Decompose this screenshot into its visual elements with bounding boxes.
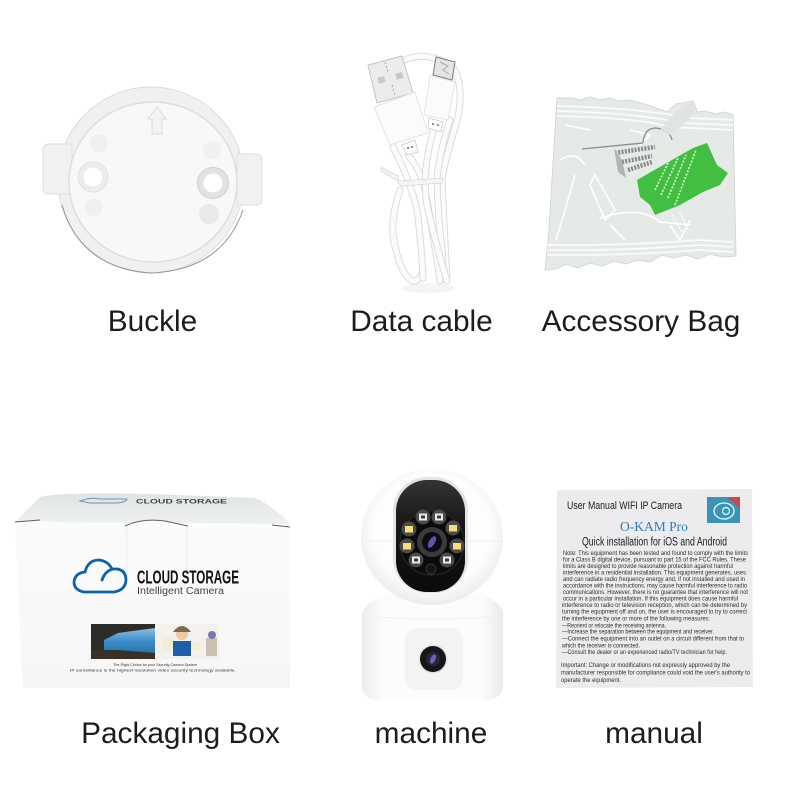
manual body text <box>561 551 751 684</box>
dark face <box>396 480 465 592</box>
manual body text: for a Class B digital device, pursuant to part 15 of the FCC Rules. These <box>563 558 747 564</box>
manual body text: interference in a residential installation. This equipment generates, uses <box>563 570 746 576</box>
image: user manual <box>556 489 753 688</box>
lid text: CLOUD STORAGE <box>136 498 228 506</box>
label: Data cable: Data cable <box>350 305 493 338</box>
manual subtitle: Quick installation for iOS and Android <box>582 536 727 548</box>
box lid <box>15 493 290 524</box>
image: dual-lens camera <box>361 469 503 700</box>
manual body text: limits are designed to provide reasonable protection against harmful <box>563 564 733 570</box>
green anchors <box>637 143 728 215</box>
image: packaging box <box>15 493 290 688</box>
USB metal plug <box>368 56 413 103</box>
buckle screw holes <box>78 162 228 198</box>
manual card <box>556 489 753 688</box>
micro USB metal plug <box>433 57 455 80</box>
manual body text: communications. However, there is no guarantee that interference will not <box>563 590 748 596</box>
product name: O-KAM Pro <box>620 519 688 534</box>
cloud icon <box>74 560 126 592</box>
image: accessory bag <box>545 97 736 270</box>
manual body text: manufacturer responsible for compliance could void the user's authority to <box>561 671 751 677</box>
image: data cable <box>368 56 460 293</box>
bag seal lines <box>547 106 733 255</box>
manual body text: —Consult the dealer or an experienced radio/TV technician for help. <box>562 650 727 656</box>
main lens <box>417 527 447 557</box>
bag wrinkles <box>556 125 690 240</box>
label: Accessory Bag: Accessory Bag <box>542 305 740 338</box>
screws <box>615 147 655 170</box>
box flap crease <box>127 527 187 577</box>
bag knot <box>660 101 695 135</box>
cable tie <box>381 167 443 186</box>
photo: sea view <box>91 624 155 659</box>
photo: child with teddy bear <box>155 624 219 659</box>
image: buckle <box>43 87 262 273</box>
label: manual: manual <box>605 717 703 750</box>
micro USB housing <box>424 76 455 120</box>
screw heads <box>614 148 626 178</box>
manual body text: accordance with the instructions, may cause harmful interference to radio <box>563 584 748 590</box>
light sensor <box>426 564 436 574</box>
manual body text: which the receiver is connected. <box>561 644 640 650</box>
label: Packaging Box: Packaging Box <box>81 717 280 750</box>
label: Buckle: Buckle <box>108 305 197 338</box>
base groove <box>363 616 502 619</box>
manual body text: Important: Change or modifications not expressly approved by the <box>561 663 731 669</box>
label: machine: machine <box>375 717 487 750</box>
manual body text: interference to radio or television reception, which can be determined by <box>562 603 747 609</box>
manual body text: turning the equipment off and on, the user is encouraged to try to correct <box>562 610 747 616</box>
camera base <box>362 595 503 700</box>
box flap edges <box>15 520 290 527</box>
buckle outer ring <box>58 87 244 273</box>
camera sphere <box>361 469 503 605</box>
green anchor highlights <box>655 150 696 232</box>
pin hook <box>582 128 672 149</box>
box heading: CLOUD STORAGE <box>137 568 239 588</box>
buckle dimples <box>85 134 221 224</box>
base lens window <box>405 628 463 690</box>
base lens <box>418 644 448 674</box>
manual body text: occur in a particular installation. If this equipment does cause harmful <box>563 596 738 602</box>
cable loops <box>393 56 460 281</box>
buckle left tab <box>43 144 72 194</box>
box subheading: Intelligent Camera <box>137 586 224 597</box>
manual body text: and can radiate radio frequency energy and, if not installed and used in <box>563 577 745 583</box>
buckle arrow <box>148 107 166 134</box>
manual body text: Note: This equipment has been tested and found to comply with the limits <box>563 551 748 557</box>
manual body text: —Increase the separation between the equipment and receiver. <box>562 630 714 636</box>
box caption line 2: IP surveillance is the highest resolution video security technology available. <box>70 668 236 672</box>
USB housing <box>374 92 428 145</box>
manual body text: —Reorient or relocate the receiving antenna. <box>562 624 666 630</box>
box front <box>15 520 290 688</box>
sphere seam <box>361 540 503 542</box>
manual body text: the interference by one or more of the following measures: <box>562 617 710 623</box>
buckle inner plate <box>69 102 237 262</box>
lid cloud mark <box>80 498 127 503</box>
sphere face frame <box>393 477 468 593</box>
USB strain relief <box>402 140 418 155</box>
app logo <box>707 497 740 523</box>
bag film <box>545 97 736 270</box>
LED ring <box>400 511 464 575</box>
cable reflection <box>402 283 454 293</box>
manual title: User Manual WIFI IP Camera <box>567 500 683 512</box>
manual body text: —Connect the equipment into an outlet on a circuit different from that to <box>562 636 745 642</box>
box caption: The Right Choice for your Security Camera System <box>113 663 197 667</box>
buckle right tab <box>237 154 262 205</box>
LEDs <box>400 510 464 568</box>
micro USB strain relief <box>428 118 443 132</box>
manual body text: operate the equipment. <box>561 678 621 684</box>
